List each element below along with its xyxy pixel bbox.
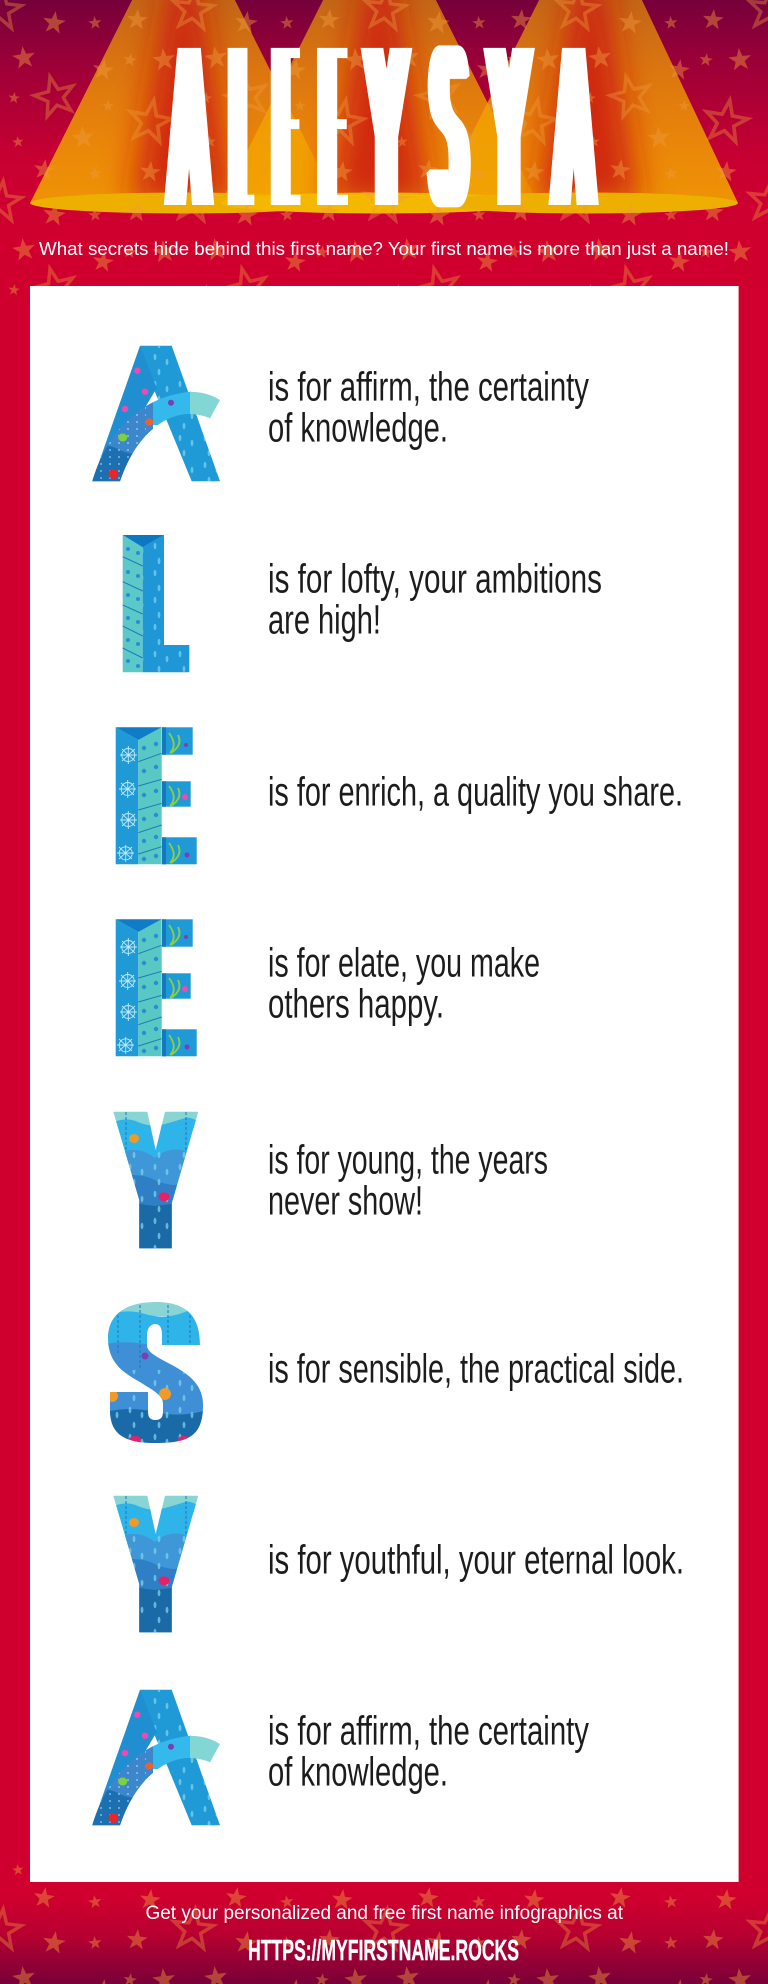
title: L: [235, 0, 246, 260]
footer url: HTTPS://MYFIRSTNAME.ROCKS: [248, 1935, 519, 1967]
icon: letter E: [116, 727, 197, 864]
icon: letter A second: [88, 1690, 224, 1829]
icon: letter Y second: [110, 1494, 202, 1634]
text: A second: [268, 1708, 589, 1795]
panel: white content: [30, 286, 739, 1882]
text: A second: is for affirm, the certainty: [268, 1708, 589, 1754]
title: [172, 0, 591, 260]
row: letter S: [105, 1300, 684, 1450]
text: A: [557, 0, 591, 260]
row: letter L: [123, 535, 602, 672]
text: E second: is for elate, you make: [268, 940, 540, 986]
subtitle: What secrets hide behind this first name? Your first name is more than just a name!: [39, 238, 729, 259]
text: A second: of knowledge.: [268, 1749, 448, 1795]
icon: letter L: [123, 535, 189, 672]
star pattern top: [0, 0, 768, 298]
text: A: [268, 364, 589, 451]
text: A: of knowledge.: [268, 405, 448, 451]
row: letter Y: [110, 1110, 548, 1250]
title: Y: [490, 0, 528, 260]
icon: letter A: [88, 346, 224, 485]
row: letter Y second: [110, 1494, 684, 1634]
spotlight cones: [30, 0, 738, 214]
text: L: are high!: [268, 597, 381, 643]
row: letter E: [116, 727, 683, 864]
text: Y: never show!: [268, 1178, 423, 1224]
title: S: [433, 0, 464, 260]
text: A: is for affirm, the certainty: [268, 364, 589, 410]
fish: [108, 469, 118, 479]
icon: letter Y: [110, 1110, 202, 1250]
footer text: Get your personalized and free first name infographics at: [146, 1903, 624, 1924]
text: Y: is for young, the years: [268, 1136, 548, 1182]
title: E: [278, 0, 292, 260]
icon: letter E second: [116, 919, 197, 1056]
title: E: [324, 0, 340, 260]
text: L: [268, 556, 602, 643]
icon: letter S: [108, 1302, 203, 1443]
text: E second: [268, 940, 540, 1027]
text: Y: [268, 1136, 548, 1224]
row: letter A: [88, 346, 589, 485]
title: A: [172, 0, 206, 260]
row: letter A second: [88, 1690, 589, 1829]
text: E second: others happy.: [268, 981, 444, 1027]
text: L: is for lofty, your ambitions: [268, 556, 602, 602]
star pattern bottom: [0, 1862, 768, 1984]
title: Y: [367, 0, 406, 260]
row: letter E second: [116, 919, 540, 1056]
